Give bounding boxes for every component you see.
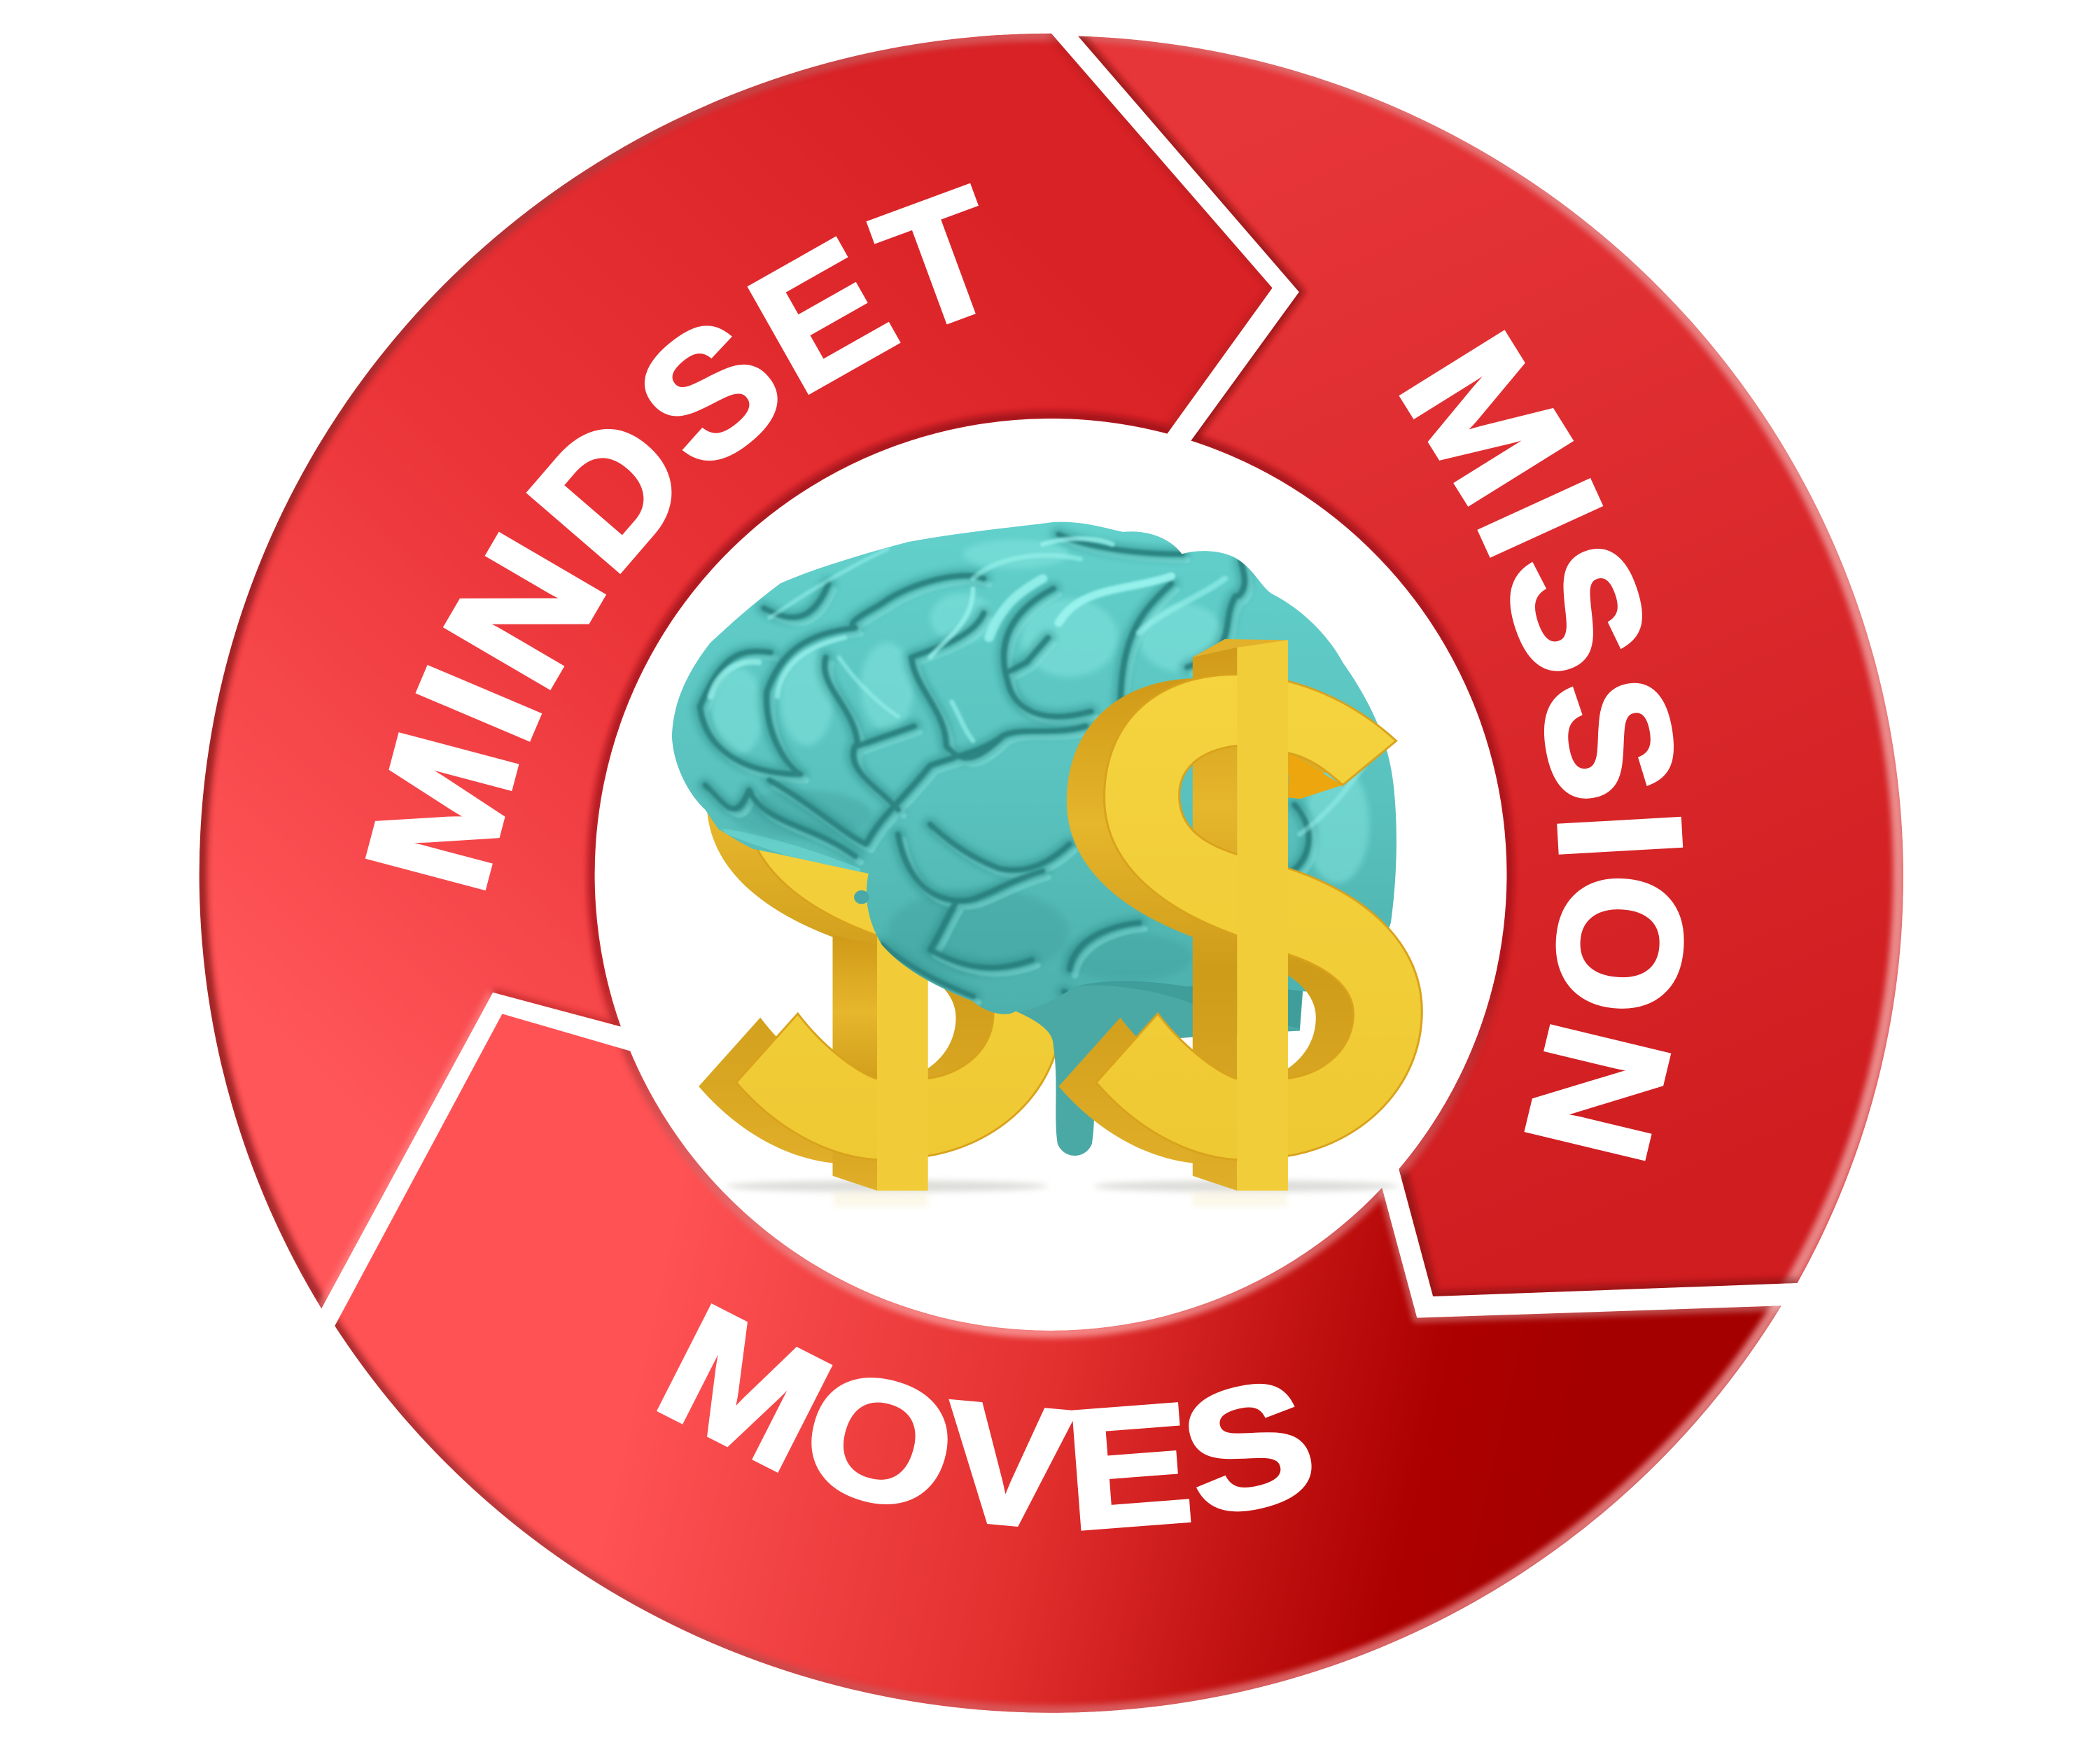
icon: front dollar sign [1058, 639, 1422, 1191]
segment: mindset arrow [200, 34, 1273, 1308]
brain surface detail clipped to outline [700, 534, 1369, 1051]
segment: moves arrow [335, 1014, 1782, 1713]
label: MISSION: MISSION [1399, 330, 1684, 1161]
label: MOVES: MOVES [657, 1303, 1312, 1531]
floor shadows [727, 1180, 1399, 1207]
segment: mission arrow [1078, 36, 1903, 1296]
icon: back dollar sign [699, 648, 1062, 1191]
cerebellum and brain stem [1016, 962, 1305, 1156]
brain [672, 522, 1396, 1156]
infographic: mindset mission moves cycle [199, 34, 1903, 1713]
label: MINDSET: MINDSET [365, 183, 979, 890]
illustration: brain with dollar signs [672, 522, 1422, 1207]
